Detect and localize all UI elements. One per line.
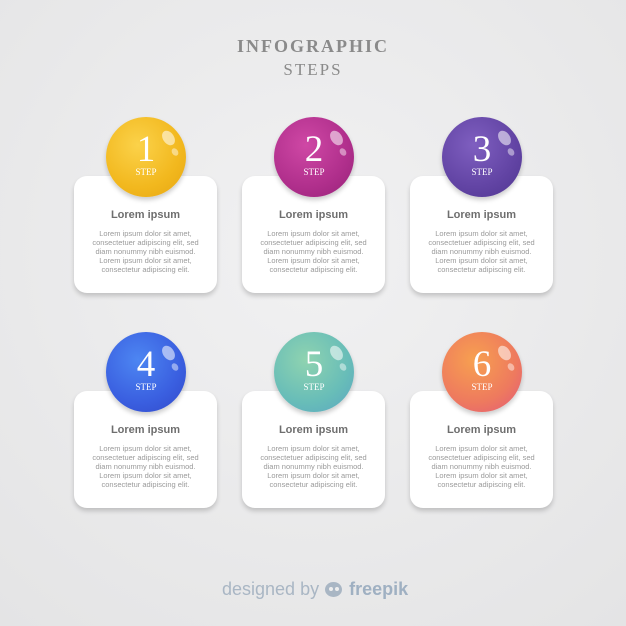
- card 5: Lorem ipsum dolor sit amet,: [267, 444, 360, 453]
- card 6: Lorem ipsum dolor sit amet,: [435, 471, 528, 480]
- card 5: Lorem ipsum dolor sit amet,: [267, 471, 360, 480]
- card 5: consectetuer adipiscing elit, sed: [260, 453, 367, 462]
- step circle 1: 1: [137, 129, 155, 170]
- step circle 1: [106, 117, 186, 197]
- card 3: [410, 176, 553, 293]
- step circle 2: [274, 117, 354, 197]
- card 2: Lorem ipsum dolor sit amet,: [267, 256, 360, 265]
- card 4: consectetur adipiscing elit.: [102, 480, 189, 489]
- step circle 4: STEP: [135, 382, 156, 392]
- card 2: [242, 176, 385, 293]
- card 1: consectetuer adipiscing elit, sed: [92, 238, 199, 247]
- step circle 3: STEP: [471, 167, 492, 177]
- title: INFOGRAPHIC: [237, 36, 389, 56]
- card 6: consectetuer adipiscing elit, sed: [428, 453, 535, 462]
- card 1: [74, 176, 217, 293]
- card 2: Lorem ipsum dolor sit amet,: [267, 229, 360, 238]
- step circle 3: 3: [473, 129, 491, 170]
- card 2: consectetuer adipiscing elit, sed: [260, 238, 367, 247]
- step circle 4: 4: [137, 344, 155, 385]
- card 3: consectetur adipiscing elit.: [438, 265, 525, 274]
- step circle 3: [442, 117, 522, 197]
- card 6: diam nonummy nibh euismod.: [431, 462, 532, 471]
- step circle 5: STEP: [303, 382, 324, 392]
- step circle 6: [442, 332, 522, 412]
- card 2: consectetur adipiscing elit.: [270, 265, 357, 274]
- card 1: Lorem ipsum dolor sit amet,: [99, 256, 192, 265]
- card 2: Lorem ipsum: [279, 209, 348, 221]
- card 1: Lorem ipsum: [111, 209, 180, 221]
- step circle 5: 5: [305, 344, 323, 385]
- card 4: Lorem ipsum dolor sit amet,: [99, 444, 192, 453]
- card 4: [74, 391, 217, 508]
- card 3: consectetuer adipiscing elit, sed: [428, 238, 535, 247]
- card 1: diam nonummy nibh euismod.: [95, 247, 196, 256]
- card 1: consectetur adipiscing elit.: [102, 265, 189, 274]
- card 4: Lorem ipsum dolor sit amet,: [99, 471, 192, 480]
- card 2: diam nonummy nibh euismod.: [263, 247, 364, 256]
- card 1: Lorem ipsum dolor sit amet,: [99, 229, 192, 238]
- step circle 2: 2: [305, 129, 323, 170]
- card 3: Lorem ipsum dolor sit amet,: [435, 256, 528, 265]
- card 6: Lorem ipsum dolor sit amet,: [435, 444, 528, 453]
- card 6: Lorem ipsum: [447, 424, 516, 436]
- icon: freepik mascot: [325, 582, 342, 597]
- step circle 2: STEP: [303, 167, 324, 177]
- card 5: [242, 391, 385, 508]
- step circle 4: [106, 332, 186, 412]
- card 4: consectetuer adipiscing elit, sed: [92, 453, 199, 462]
- step circle 6: STEP: [471, 382, 492, 392]
- card 5: diam nonummy nibh euismod.: [263, 462, 364, 471]
- card 5: Lorem ipsum: [279, 424, 348, 436]
- card 6: consectetur adipiscing elit.: [438, 480, 525, 489]
- card 3: Lorem ipsum: [447, 209, 516, 221]
- step circle 5: [274, 332, 354, 412]
- card 5: consectetur adipiscing elit.: [270, 480, 357, 489]
- card 3: Lorem ipsum dolor sit amet,: [435, 229, 528, 238]
- card 6: [410, 391, 553, 508]
- card 4: Lorem ipsum: [111, 424, 180, 436]
- card 4: diam nonummy nibh euismod.: [95, 462, 196, 471]
- card 3: diam nonummy nibh euismod.: [431, 247, 532, 256]
- subtitle: STEPS: [283, 60, 343, 79]
- step circle 6: 6: [473, 344, 491, 385]
- step circle 1: STEP: [135, 167, 156, 177]
- footer: designed by freepik: designed by freepik: [222, 579, 408, 599]
